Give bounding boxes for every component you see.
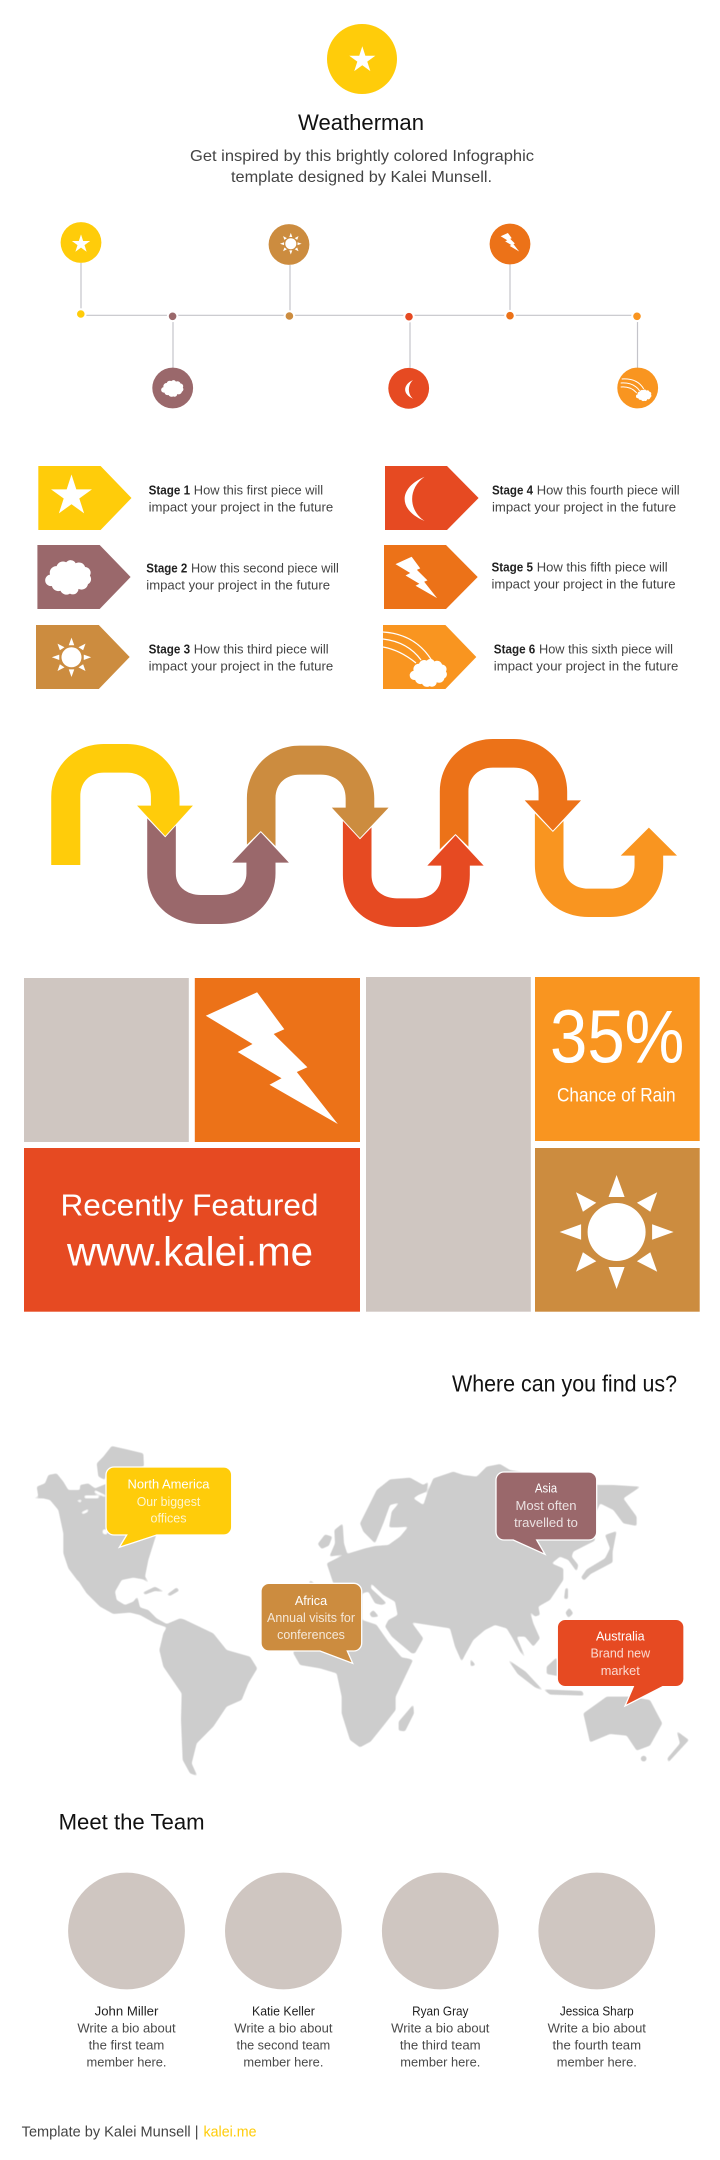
timeline — [61, 222, 658, 409]
callout: asia: Most often — [516, 1499, 577, 1513]
tile grid — [24, 977, 700, 1312]
stage 1 — [38, 466, 333, 530]
team member: John Miller — [68, 1873, 185, 2070]
callout: asia — [496, 1472, 597, 1554]
arrow: red up — [343, 821, 484, 927]
footer: kalei.me — [204, 2125, 256, 2141]
subtitle: Get inspired by this brightly colored Infographic — [190, 148, 534, 165]
team member: Ryan Gray: the third team — [400, 2038, 481, 2053]
arrow chain — [51, 739, 677, 927]
callout: africa: Annual visits for — [267, 1611, 355, 1625]
stage 4: How this fourth piece will — [537, 483, 680, 498]
callout: north america: offices — [150, 1512, 186, 1526]
map: greenland — [97, 1446, 144, 1480]
stage 4: Stage 4 — [492, 483, 534, 498]
map: australia — [583, 1697, 689, 1762]
heading: meet the team: Meet the Team — [59, 1809, 205, 1834]
callout: australia: Brand new — [590, 1647, 651, 1661]
icon: timeline cloud — [152, 368, 193, 408]
team member: John Miller: the first team — [89, 2038, 164, 2053]
tile: sun — [535, 1148, 700, 1312]
stage 5: How this fifth piece will — [537, 560, 668, 575]
subtitle: template designed by Kalei Munsell. — [231, 169, 492, 186]
footer: Template by Kalei Munsell | — [22, 2125, 199, 2141]
callout: australia: market — [601, 1664, 640, 1678]
stage 6: impact your project in the future — [494, 659, 678, 674]
timeline axis and connectors — [81, 263, 638, 368]
stage 4 — [385, 466, 680, 530]
callout: asia: travelled to — [514, 1516, 578, 1530]
title: Weatherman — [298, 110, 424, 135]
arrow: tan down — [247, 746, 389, 846]
panel: stages — [36, 466, 680, 689]
tile: recently featured: Recently Featured — [60, 1187, 318, 1222]
tile: chance of rain — [535, 977, 700, 1141]
icon: timeline moon — [388, 368, 429, 409]
callout: asia: Asia — [535, 1480, 558, 1495]
timeline dots — [76, 309, 642, 322]
icon: timeline sun — [269, 224, 309, 265]
team member: Jessica Sharp: the fourth team — [552, 2038, 641, 2053]
callout: north america: Our biggest — [137, 1495, 201, 1509]
map: north and south america — [32, 1470, 257, 1776]
map: eurasia — [327, 1464, 641, 1662]
icon: timeline lightning — [490, 224, 530, 264]
map: british isles — [318, 1523, 347, 1557]
stage 1: How this first piece will — [194, 483, 323, 498]
team member: Ryan Gray — [382, 1873, 499, 2070]
header — [190, 24, 534, 186]
team member: Ryan Gray: Write a bio about — [391, 2021, 490, 2036]
stage 6 — [383, 625, 678, 689]
tile: tall gray placeholder — [366, 977, 531, 1312]
tile: gray placeholder — [24, 978, 189, 1142]
callout: north america: North America — [128, 1476, 210, 1491]
stage 1: impact your project in the future — [149, 500, 333, 515]
stage 2: impact your project in the future — [146, 578, 330, 593]
tile: chance of rain: Chance of Rain — [557, 1085, 676, 1106]
team member: Jessica Sharp: member here. — [557, 2055, 637, 2070]
callout: australia — [557, 1619, 684, 1706]
team member: Ryan Gray: Ryan Gray — [412, 2004, 469, 2019]
stage 2 — [37, 545, 339, 609]
world map — [0, 1420, 720, 1817]
team member: Jessica Sharp: Write a bio about — [548, 2021, 646, 2036]
stage 2: How this second piece will — [191, 561, 339, 576]
team — [68, 1873, 655, 2070]
stage 2: Stage 2 — [146, 561, 187, 576]
stage 5: Stage 5 — [492, 560, 533, 575]
stage 5: impact your project in the future — [492, 577, 676, 592]
map: water cut-outs — [76, 1490, 414, 1661]
stage 1: Stage 1 — [149, 483, 190, 498]
stage 6: Stage 6 — [494, 642, 535, 657]
icon: timeline star — [61, 222, 101, 263]
arrow: amber up — [535, 813, 677, 917]
heading: where can you find us: Where can you find us? — [452, 1371, 677, 1397]
team member: Katie Keller: Write a bio about — [234, 2021, 333, 2036]
stage 3: impact your project in the future — [149, 659, 333, 674]
map: caribbean islands — [143, 1587, 179, 1596]
team member: John Miller: John Miller — [95, 2004, 159, 2019]
team member: Katie Keller: member here. — [243, 2055, 323, 2070]
stage 6: How this sixth piece will — [539, 642, 673, 657]
arrow: mauve up — [147, 818, 289, 924]
subtitle — [190, 148, 534, 186]
callout: africa: conferences — [277, 1628, 345, 1642]
tile: recently featured: www.kalei.me — [66, 1228, 313, 1274]
arrow: dark orange down — [440, 739, 581, 849]
callout: north america — [106, 1467, 232, 1547]
stage 5 — [384, 545, 676, 609]
team member: Katie Keller: the second team — [237, 2038, 330, 2053]
arrow: yellow down — [51, 744, 193, 865]
stage 4: impact your project in the future — [492, 500, 676, 515]
map: asian islands — [470, 1531, 617, 1696]
map: madagascar — [399, 1704, 414, 1731]
tile: chance of rain: 35% — [550, 995, 684, 1079]
team member: Jessica Sharp — [538, 1873, 655, 2070]
tile: recently featured — [24, 1148, 360, 1312]
team member: Katie Keller: Katie Keller — [252, 2004, 315, 2019]
icon: timeline comet — [617, 368, 658, 408]
callout: africa: Africa — [295, 1593, 328, 1608]
team member: Jessica Sharp: Jessica Sharp — [560, 2004, 634, 2019]
team member: Ryan Gray: member here. — [400, 2055, 480, 2070]
stage 3 — [36, 625, 333, 689]
icon: header star badge — [327, 24, 397, 94]
team member: John Miller: member here. — [86, 2055, 166, 2070]
callout: africa — [261, 1583, 362, 1663]
stage 3: How this third piece will — [194, 642, 329, 657]
team member: Katie Keller — [225, 1873, 342, 2070]
stage 3: Stage 3 — [149, 642, 190, 657]
callout: australia: Australia — [596, 1629, 645, 1644]
tile: lightning — [195, 978, 360, 1142]
map: africa — [293, 1580, 413, 1747]
team member: John Miller: Write a bio about — [77, 2021, 176, 2036]
